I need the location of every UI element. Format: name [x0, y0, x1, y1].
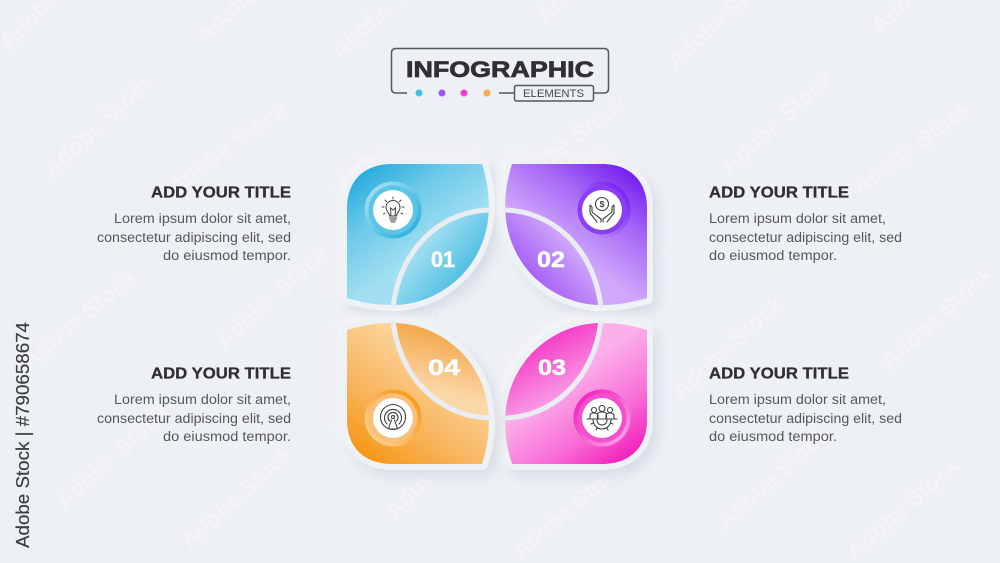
watermark pattern: Adobe Stock	[17, 263, 141, 374]
watermark pattern: Adobe Stock	[841, 452, 965, 563]
body text: Lorem ipsum dolor sit amet,	[114, 211, 291, 226]
icon: light bulb	[364, 182, 422, 238]
watermark pattern: Adobe Stock	[337, 283, 461, 394]
body text: do eiusmod tempor.	[163, 248, 291, 263]
body text	[709, 392, 902, 444]
body text: do eiusmod tempor.	[709, 429, 837, 444]
body text: consectetur adipiscing elit, sed	[709, 411, 902, 426]
icon: signal target	[364, 390, 422, 446]
number 02: 02	[537, 247, 565, 272]
watermark pattern: Adobe Stock	[711, 422, 835, 534]
watermark pattern: Adobe Stock	[211, 240, 333, 354]
title badge	[392, 48, 608, 101]
body text: Lorem ipsum dolor sit amet,	[709, 392, 886, 407]
watermark pattern: Adobe Stock	[503, 90, 632, 194]
number 01: 01	[431, 247, 455, 272]
text block: top right	[709, 184, 902, 263]
watermark pattern: Adobe Stock	[848, 95, 977, 199]
body text	[97, 211, 291, 263]
icon: team and gear	[574, 390, 630, 446]
heading: ADD YOUR TITLE	[151, 184, 291, 202]
body text: consectetur adipiscing elit, sed	[97, 411, 291, 426]
heading: ADD YOUR TITLE	[709, 184, 849, 202]
body text	[709, 211, 902, 263]
number 04: 04	[428, 355, 461, 380]
watermark pattern: Adobe Stock	[876, 260, 998, 374]
stock id side label: Adobe Stock | #790658674	[13, 322, 33, 548]
heading: ADD YOUR TITLE	[709, 366, 849, 382]
body text: do eiusmod tempor.	[163, 429, 291, 444]
title text: INFOGRAPHIC	[406, 57, 594, 82]
icon: hands with dollar: $	[600, 199, 605, 209]
colour dots	[416, 90, 490, 96]
watermark pattern: Adobe Stock	[163, 95, 292, 199]
watermark pattern: Adobe Stock	[507, 453, 631, 563]
watermark pattern: Adobe Stock	[38, 68, 160, 182]
body text: consectetur adipiscing elit, sed	[97, 230, 291, 245]
elements tag: ELEMENTS	[523, 88, 584, 100]
watermark pattern: Adobe Stock	[555, 234, 671, 353]
watermark pattern: Adobe Stock	[666, 290, 788, 404]
body text: consectetur adipiscing elit, sed	[709, 230, 902, 245]
body text: Lorem ipsum dolor sit amet,	[114, 392, 291, 407]
body text: do eiusmod tempor.	[709, 248, 837, 263]
panel 02: purple	[484, 164, 647, 320]
panel 01: blue	[347, 164, 510, 320]
watermark pattern: Adobe Stock	[176, 440, 298, 554]
watermark pattern: Adobe Stock	[51, 400, 173, 514]
text block: top left	[97, 184, 291, 263]
number 03: 03	[538, 355, 566, 380]
body text	[97, 392, 291, 444]
watermark pattern: Adobe Stock	[380, 404, 496, 523]
text block: bottom left	[97, 366, 291, 444]
watermark pattern: Adobe Stock	[716, 65, 838, 179]
body text: Lorem ipsum dolor sit amet,	[709, 211, 886, 226]
panel 04: orange	[347, 308, 510, 464]
heading: ADD YOUR TITLE	[151, 366, 291, 382]
icon: hands with dollar	[574, 182, 630, 238]
panel 03: pink	[484, 308, 647, 464]
elements tag	[514, 86, 594, 101]
text block: bottom right	[709, 366, 902, 444]
